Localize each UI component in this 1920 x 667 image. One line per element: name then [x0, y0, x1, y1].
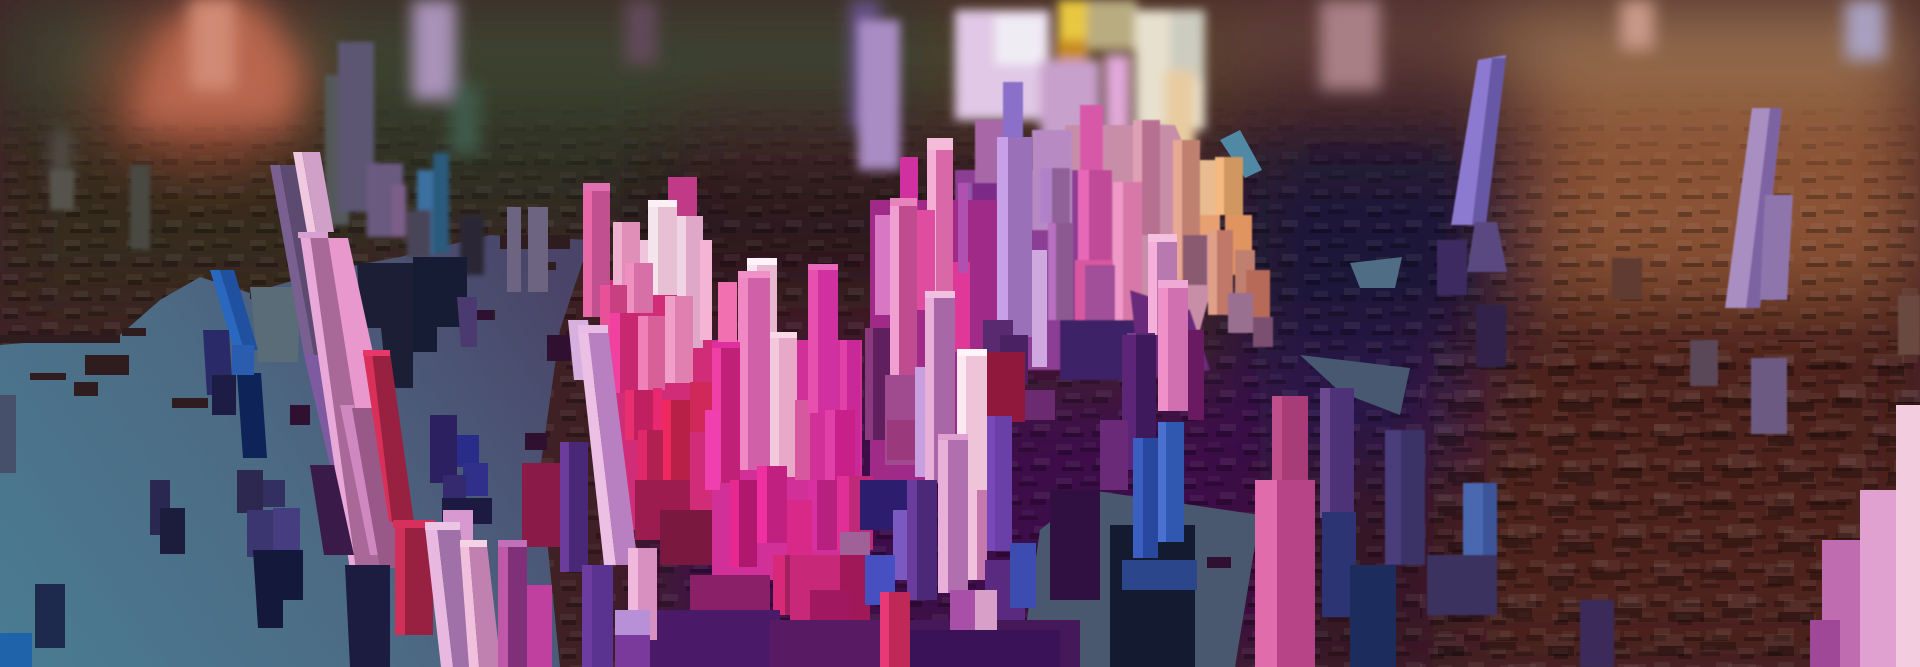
pink cluster, left	[522, 177, 720, 565]
far blurred bars	[52, 0, 1885, 190]
blurred cream, white and yellow towers at the centre top	[858, 0, 1205, 173]
reflective floor	[0, 130, 1410, 667]
far blurred orange tower mass, top left	[130, 0, 300, 125]
right centre dark and blue towers	[1050, 335, 1197, 667]
right side lone bars	[1385, 55, 1920, 667]
pale pink front tower	[865, 291, 1060, 667]
reflections in the floor, left	[250, 207, 548, 388]
pale lilac and purple front tower	[560, 320, 657, 667]
left pink towers	[0, 152, 552, 667]
pink cluster, centre	[650, 258, 1080, 667]
back left grey and blue bars	[50, 42, 484, 275]
middle magenta and lilac cluster	[865, 137, 1204, 480]
front right bars	[1255, 388, 1920, 667]
back centre tower cluster, slightly soft	[955, 82, 1273, 380]
